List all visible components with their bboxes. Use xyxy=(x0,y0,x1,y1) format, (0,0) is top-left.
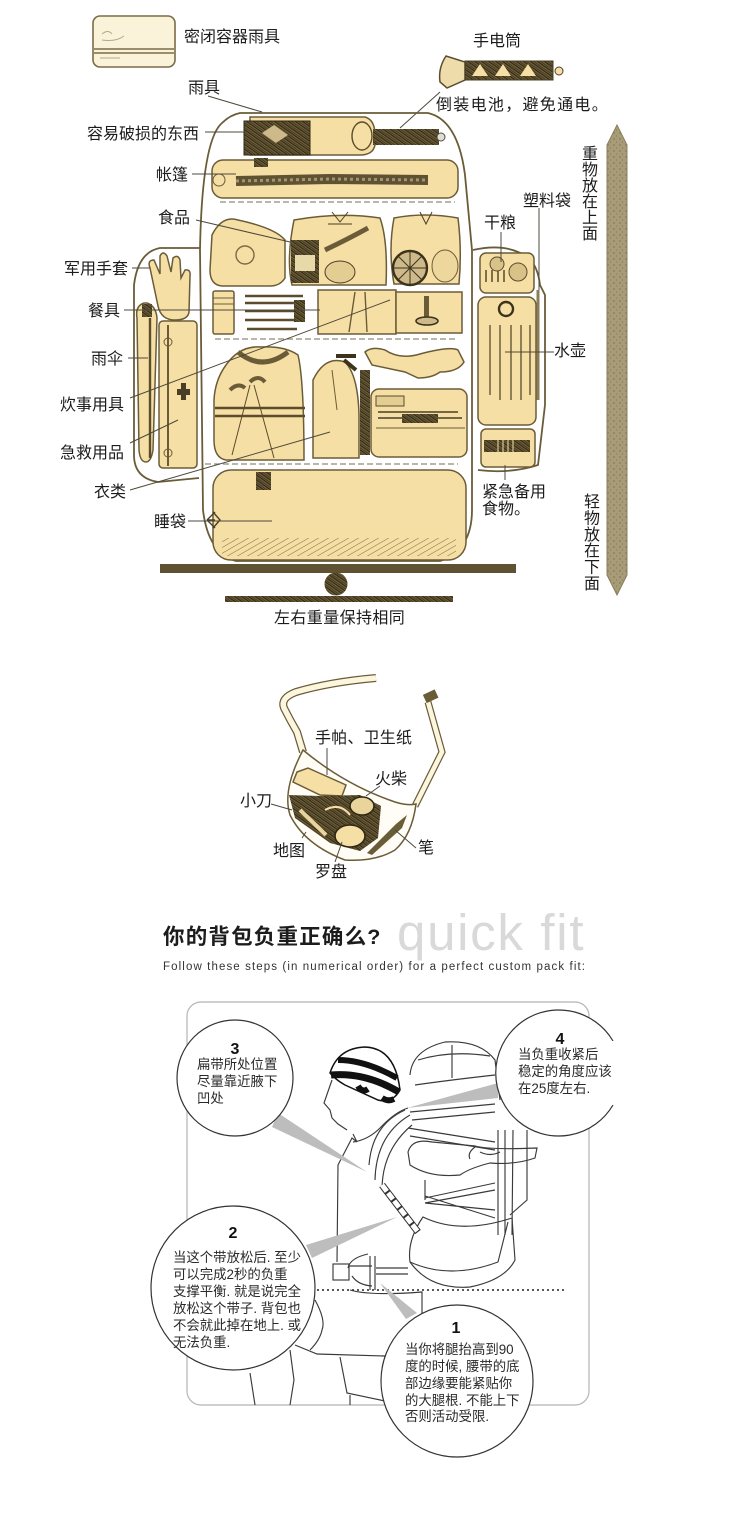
label: knife: 小刀 xyxy=(240,792,272,810)
callout 3: 3 xyxy=(231,1041,240,1058)
callout 4: 当负重收紧后 xyxy=(518,1047,598,1062)
heading: quick fit: quick fit xyxy=(397,904,585,961)
frame xyxy=(187,1002,589,1405)
callout 3: 扁带所处位置 xyxy=(197,1057,277,1072)
callout 3: 尽量靠近腋下 xyxy=(197,1074,277,1089)
legs xyxy=(250,1290,422,1405)
label: light items below: 面 xyxy=(584,576,600,593)
icon: waist pack body xyxy=(288,750,416,860)
callout 4: 在25度左右. xyxy=(518,1081,590,1096)
panel: waist pack diagram xyxy=(240,678,442,881)
callout 1: 度的时候, 腰带的底 xyxy=(405,1359,520,1374)
icon: tent xyxy=(212,158,458,198)
callout 3: 凹处 xyxy=(197,1091,224,1106)
label: cooking gear: 炊事用具 xyxy=(60,396,124,414)
callout 1 xyxy=(381,1305,533,1457)
label: water bottle: 水壶 xyxy=(554,342,586,360)
callout 2 xyxy=(151,1206,315,1370)
panel: backpack packing diagram xyxy=(60,16,627,627)
callout 2: 无法负重. xyxy=(173,1335,230,1350)
label: army gloves: 军用手套 xyxy=(64,260,128,278)
illustration: hiker with backpack xyxy=(250,1042,565,1405)
left side pocket xyxy=(134,248,200,482)
label: balance left and right: 左右重量保持相同 xyxy=(274,609,405,627)
heading: 你的背包负重正确么? xyxy=(163,925,382,949)
label: heavy items on top: 上 xyxy=(582,209,598,227)
callout 3 xyxy=(177,1020,293,1136)
icon: emergency food xyxy=(481,429,535,467)
label: light items below: 放 xyxy=(584,526,600,544)
label: emergency food: 紧急备用 xyxy=(482,484,546,501)
icon: first aid bag xyxy=(159,321,197,468)
icon: weight arrow xyxy=(607,125,627,595)
main pack outline xyxy=(200,113,472,561)
label: pen: 笔 xyxy=(418,839,434,857)
icon: tissues xyxy=(293,768,346,796)
label: clothing: 衣类 xyxy=(94,483,126,501)
icon: sweater clothing xyxy=(214,347,370,460)
label: flashlight: 手电筒 xyxy=(473,32,521,50)
icon: balance beam xyxy=(160,564,516,602)
label: matches: 火柴 xyxy=(375,770,407,788)
panel: quick fit guide xyxy=(151,904,613,1457)
callout 4: 稳定的角度应该 xyxy=(518,1063,612,1079)
callout 2: 放松这个带子. 背包也 xyxy=(173,1300,301,1316)
label: emergency food: 食物。 xyxy=(482,500,530,518)
label: sleeping bag: 睡袋 xyxy=(154,513,186,531)
label: dry food: 干粮 xyxy=(484,214,516,232)
callout 1: 当你将腿抬高到90 xyxy=(405,1341,514,1357)
icon: dry food xyxy=(480,253,534,293)
callout 2: 不会就此掉在地上. 或 xyxy=(173,1318,301,1333)
callout 2: 支撑平衡. 就是说完全 xyxy=(173,1283,302,1299)
icon: gloves xyxy=(149,253,190,320)
dotted waist line xyxy=(317,1289,565,1291)
icon: toiletries kit xyxy=(371,389,467,457)
callout 1: 1 xyxy=(452,1320,461,1337)
label: heavy items on top: 重 xyxy=(582,146,598,163)
label: plastic bag: 塑料袋 xyxy=(523,192,571,210)
label: sealed container rain gear: 密闭容器雨具 xyxy=(184,28,280,46)
label: heavy items on top: 放 xyxy=(582,177,598,195)
callout 4: 4 xyxy=(556,1031,565,1048)
icon: mess kit and cooking gear xyxy=(213,290,462,334)
label: umbrella: 雨伞 xyxy=(91,350,123,368)
icon: flashlight xyxy=(400,56,563,128)
label: light items below: 在 xyxy=(584,542,600,560)
leader lines xyxy=(271,748,416,862)
note: reverse batteries: 倒装电池，避免通电。 xyxy=(436,96,609,114)
label: heavy items on top: 物 xyxy=(582,161,598,179)
icon: sleeping bag xyxy=(207,470,466,560)
label: fragile items: 容易破损的东西 xyxy=(87,125,199,143)
callout 2: 2 xyxy=(229,1225,238,1242)
icon: pen xyxy=(367,815,407,855)
icon: socks xyxy=(365,348,464,378)
label: heavy items on top: 在 xyxy=(582,193,598,211)
hip belt xyxy=(333,1254,408,1290)
label: map: 地图 xyxy=(273,842,305,860)
callout 2: 当这个带放松后. 至少 xyxy=(173,1249,301,1265)
icon: waist pack straps xyxy=(283,678,442,806)
icon: food bags xyxy=(210,212,460,286)
callout 1: 否则活动受限. xyxy=(405,1409,489,1424)
callout 4 xyxy=(496,1010,613,1136)
label: first aid: 急救用品 xyxy=(60,444,124,462)
label: light items below: 轻 xyxy=(584,494,600,511)
label: food: 食品 xyxy=(158,209,190,227)
label: rain gear: 雨具 xyxy=(188,80,220,97)
label: light items below: 下 xyxy=(584,560,600,577)
pointer wedges xyxy=(272,1083,498,1319)
torso and shoulder straps xyxy=(337,1108,418,1262)
right side pocket xyxy=(473,247,545,471)
icon: map, compass, matches, knife xyxy=(289,795,381,851)
icon: water bottle xyxy=(478,297,536,425)
head and hat xyxy=(324,1047,400,1130)
backpack xyxy=(408,1042,527,1287)
callout 2: 可以完成2秒的负重 xyxy=(173,1267,288,1282)
leader lines xyxy=(124,96,554,521)
label: tissues: 手帕、卫生纸 xyxy=(315,729,412,747)
icon: sealed container xyxy=(93,16,175,67)
callout 1: 部边缘要能紧贴你 xyxy=(405,1376,512,1391)
icon: rain gear and fragile items xyxy=(244,117,445,155)
icon: plastic bag xyxy=(536,290,540,400)
label: tableware: 餐具 xyxy=(88,302,120,320)
label: compass: 罗盘 xyxy=(315,862,347,881)
label: heavy items on top: 面 xyxy=(582,226,598,243)
callout 1: 的大腿根. 不能上下 xyxy=(405,1393,520,1408)
label: light items below: 物 xyxy=(584,509,600,527)
icon: umbrella xyxy=(137,303,157,462)
outstretched arm xyxy=(408,1141,537,1200)
subtitle: Follow these steps (in numerical order) for a perfect custom pack fit: xyxy=(163,961,585,973)
label: tent: 帐篷 xyxy=(156,165,188,184)
